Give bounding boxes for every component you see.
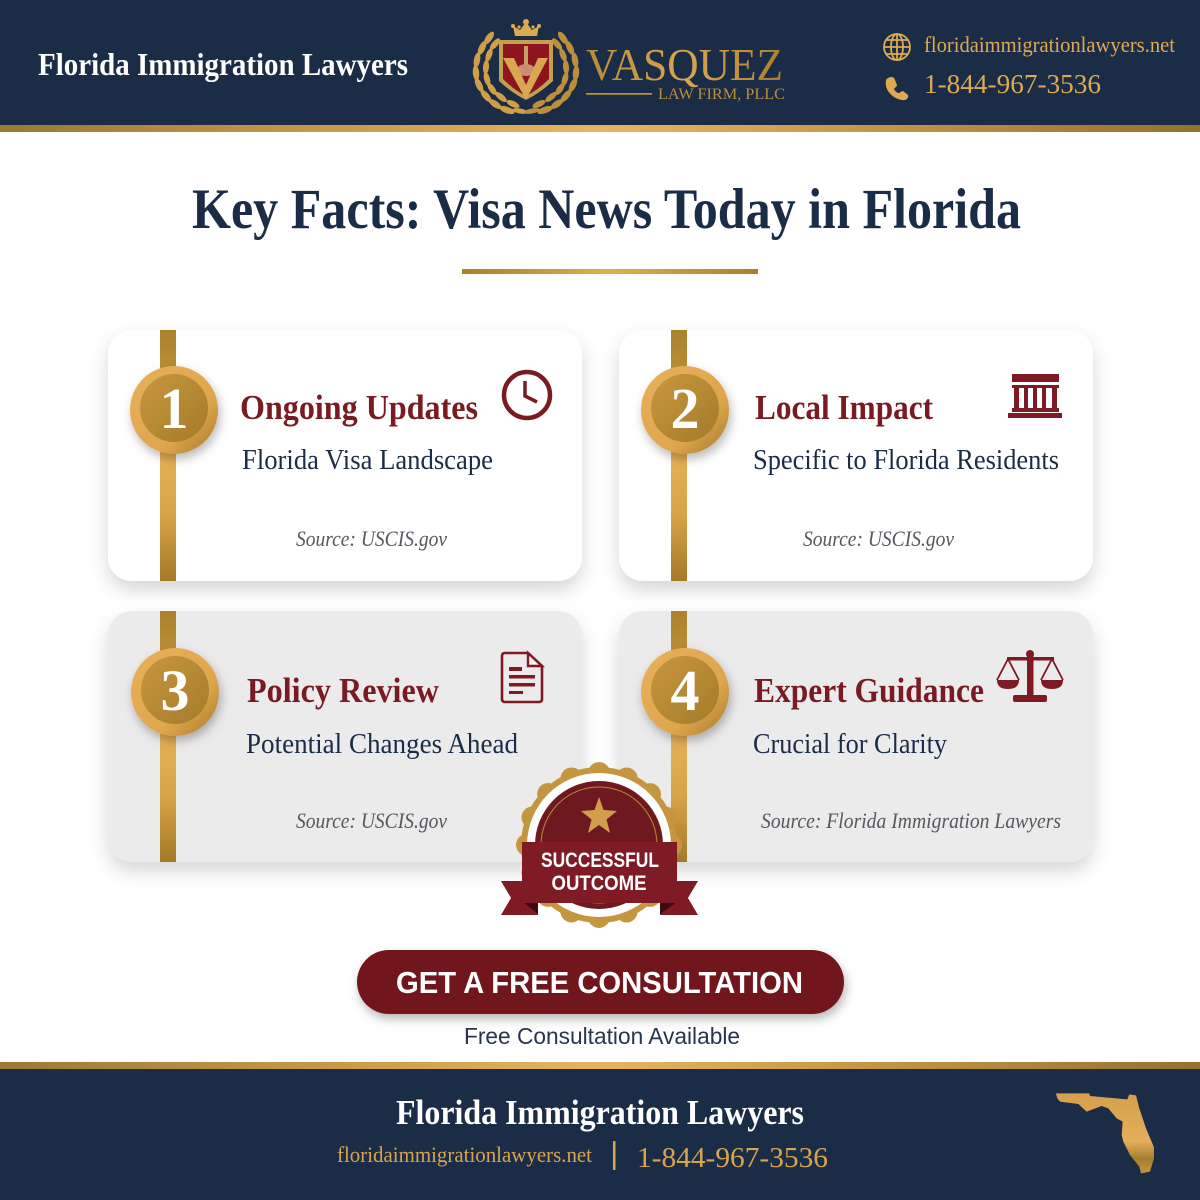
footer band (0, 1062, 1200, 1200)
number badge 2 (641, 366, 729, 454)
card heading: Expert Guidance (754, 671, 984, 710)
badge: successful outcome (501, 767, 698, 923)
icon: laurel wreath left (472, 30, 528, 116)
header firm name: Florida Immigration Lawyers (38, 46, 408, 82)
panel: card 1 (108, 330, 582, 581)
gold bar (160, 611, 176, 862)
panel: card 2 (619, 330, 1093, 581)
card text: Florida Visa Landscape (242, 444, 493, 476)
number badge 4: 4 (670, 658, 700, 723)
number badge 3 (131, 648, 219, 736)
panel: card 3 (108, 611, 582, 862)
scalloped seal (521, 767, 677, 923)
call to action button: GET A FREE CONSULTATION (396, 965, 803, 1000)
badge text: SUCCESSFUL (541, 849, 659, 872)
panel: card 4 (619, 611, 1093, 862)
icon: crown (511, 19, 541, 36)
header website: floridaimmigrationlawyers.net (924, 32, 1175, 57)
card source: Source: USCIS.gov (803, 526, 954, 551)
gold bar (671, 330, 687, 581)
number badge 1: 1 (160, 376, 188, 441)
icon: laurel wreath right (524, 30, 580, 116)
card source: Source: USCIS.gov (296, 526, 447, 551)
ribbon tails (501, 881, 698, 915)
card source: Source: USCIS.gov (296, 808, 447, 833)
call to action button (357, 950, 844, 1014)
number badge 1 (130, 366, 218, 454)
logo subline: LAW FIRM, PLLC (658, 86, 785, 103)
icon: phone (886, 77, 908, 100)
icon: star (581, 797, 617, 833)
icon: clock (504, 372, 550, 418)
card heading: Policy Review (247, 671, 440, 710)
card heading: Local Impact (755, 388, 933, 427)
icon: globe (884, 34, 910, 60)
icon: courthouse (1008, 374, 1062, 418)
footer website: floridaimmigrationlawyers.net (337, 1142, 593, 1167)
icon: scales of justice (997, 650, 1063, 702)
icon: document (502, 653, 542, 702)
title underline (462, 269, 758, 274)
logo wordmark: VASQUEZ (586, 39, 783, 90)
header phone: 1-844-967-3536 (924, 69, 1101, 99)
title: Key Facts: Visa News Today in Florida (192, 178, 1021, 241)
card text: Potential Changes Ahead (246, 728, 518, 760)
logo: Vasquez Law Firm (472, 19, 785, 116)
icon: Florida map (1056, 1093, 1154, 1173)
header band (0, 0, 1200, 132)
ribbon banner (522, 842, 677, 903)
consultation note: Free Consultation Available (464, 1023, 740, 1049)
footer phone: 1-844-967-3536 (637, 1142, 828, 1174)
footer divider (613, 1141, 616, 1170)
card text: Specific to Florida Residents (753, 444, 1059, 476)
card text: Crucial for Clarity (753, 728, 947, 760)
number badge 4 (641, 648, 729, 736)
card source: Source: Florida Immigration Lawyers (761, 808, 1061, 833)
card heading: Ongoing Updates (240, 388, 478, 427)
gold bar (671, 611, 687, 862)
footer firm name: Florida Immigration Lawyers (396, 1093, 804, 1132)
number badge 2: 2 (670, 376, 700, 441)
icon: shield (499, 40, 553, 100)
badge text line 2: OUTCOME (552, 872, 646, 895)
number badge 3: 3 (160, 658, 190, 723)
gold bar (160, 330, 176, 581)
